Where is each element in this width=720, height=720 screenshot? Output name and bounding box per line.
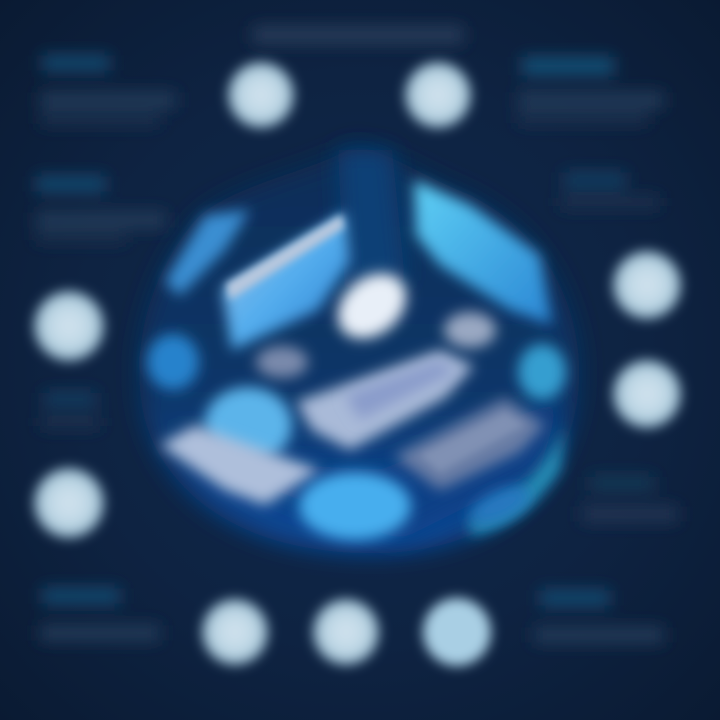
icon: right teal bubble	[518, 344, 566, 400]
icon: right node upper	[613, 251, 681, 319]
icon: bottom cloud	[299, 472, 411, 540]
panel: central illustration	[139, 145, 579, 553]
text block: bottom right	[534, 590, 664, 643]
text block: bottom left	[40, 588, 160, 641]
icon: bottom node right	[423, 598, 491, 666]
icon: bottom node left	[202, 599, 268, 665]
icon: left cloud bubble	[204, 387, 292, 463]
icon: left card	[160, 425, 320, 505]
text block: top left	[40, 55, 176, 125]
text block: lower right	[582, 476, 678, 522]
icon: left node upper	[34, 291, 104, 361]
icon: right node lower	[613, 360, 681, 428]
icon: top node right	[405, 62, 471, 128]
central blob	[139, 145, 579, 553]
icon: small grey tile left	[256, 346, 308, 378]
text block: top right	[518, 57, 664, 124]
icon: top node left	[228, 62, 294, 128]
icon: right keyboard	[394, 398, 545, 490]
icon: bottom node centre	[313, 599, 379, 665]
dark inner shade	[200, 400, 560, 540]
bottom rim highlight	[470, 425, 565, 535]
text block: left middle	[40, 392, 100, 428]
title	[252, 26, 464, 44]
icon: upper right screen	[414, 180, 552, 325]
icon: lower right glow	[465, 479, 535, 531]
icon: left node lower	[34, 468, 104, 538]
text block: upper right	[560, 172, 660, 208]
icon: centre keyboard	[296, 350, 474, 450]
icon: upper left small panel	[165, 210, 250, 296]
icon: small grey tile right	[444, 312, 496, 348]
icon: left blue bubble	[147, 334, 199, 390]
icon: centre left screen	[222, 212, 350, 350]
icon: white centre shape	[325, 260, 419, 352]
dark central column	[338, 150, 405, 290]
text block: upper left	[36, 176, 166, 242]
